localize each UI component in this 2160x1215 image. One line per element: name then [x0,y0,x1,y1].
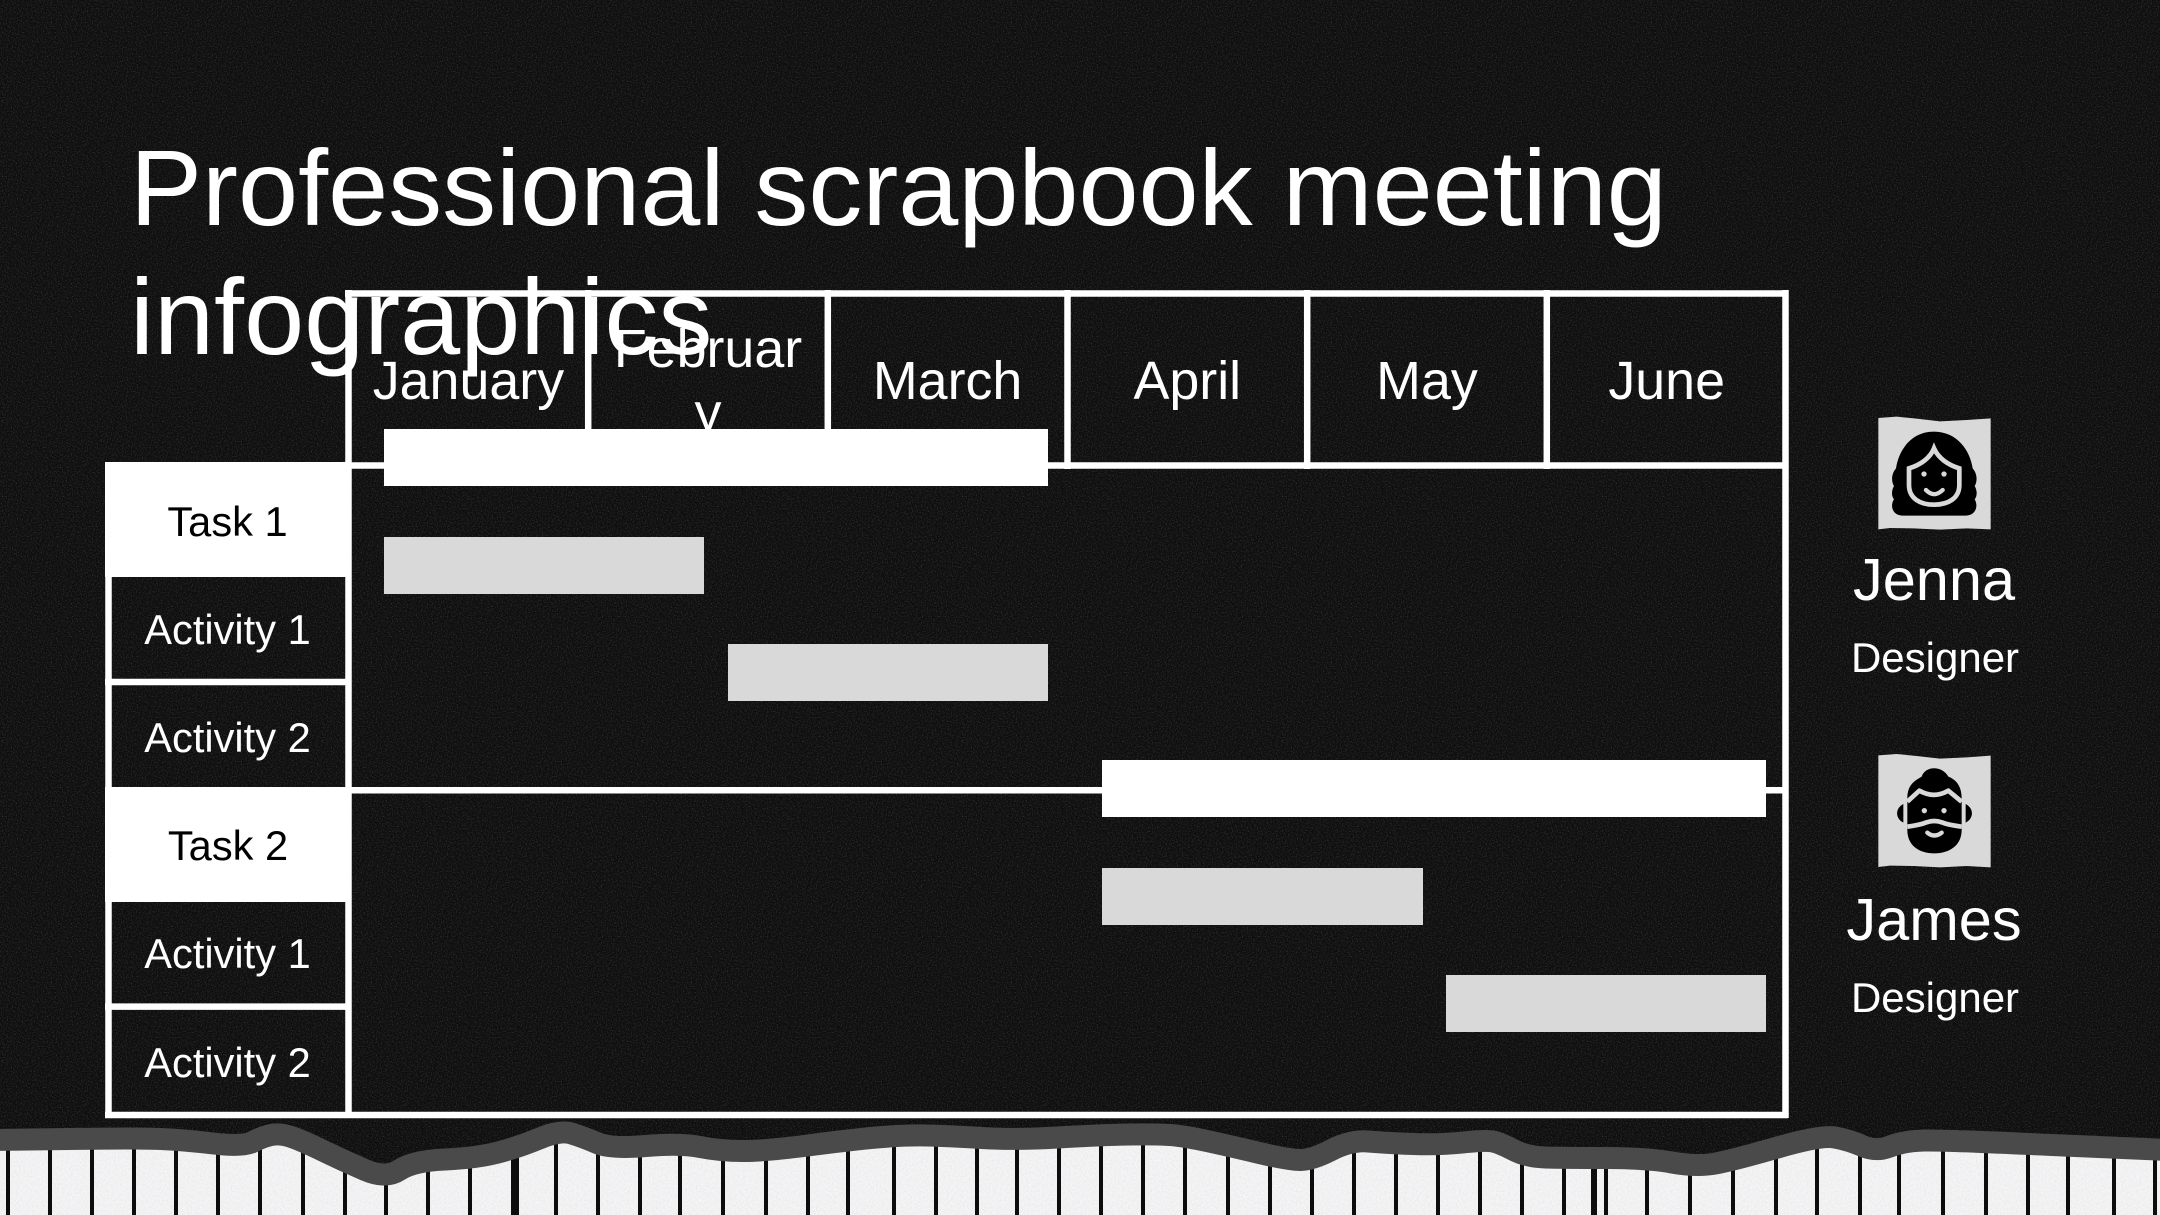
month headers: April [1133,351,1241,411]
gantt bar: Task 1 Activity 2 [728,644,1048,701]
month headers: y [695,383,722,443]
name: Jenna: Jenna [1853,546,2016,613]
row label: Activity 1: Activity 1 [144,606,311,653]
icon: James avatar [1878,754,1991,868]
row label: Task 2 [105,787,349,902]
gantt table grid [105,290,1788,1118]
month headers: January [373,351,564,411]
month headers: May [1376,351,1478,411]
role: Jenna: Designer [1851,634,2019,681]
month headers [373,319,1725,443]
role: James: Designer [1851,974,2019,1021]
gantt bar: Task 1 Activity 1 [384,537,704,594]
row label: Task 1 [105,462,349,577]
row label: Task 2: Task 2 [168,822,288,869]
name: James: James [1846,886,2022,953]
gantt bar: Task 1 [384,429,1048,486]
title: Professional scrapbook meeting [130,127,1667,248]
gantt bar: Task 2 Activity 2 [1446,975,1766,1032]
row label: Activity 2: Activity 2 [144,714,311,761]
gantt bar: Task 2 Activity 1 [1102,868,1423,925]
gantt bar: Task 2 [1102,760,1766,817]
row label: Activity 2 (task 2): Activity 2 [144,1039,311,1086]
row label: Activity 1 (task 2): Activity 1 [144,930,311,977]
title [130,127,1667,377]
month headers: March [873,351,1022,411]
title: infographics [130,256,712,377]
torn paper strip at bottom [0,1122,2160,1215]
month headers: Februar [614,319,802,379]
month headers: June [1608,351,1725,411]
icon: Jenna avatar [1878,416,1991,530]
row label: Task 1: Task 1 [167,498,288,545]
